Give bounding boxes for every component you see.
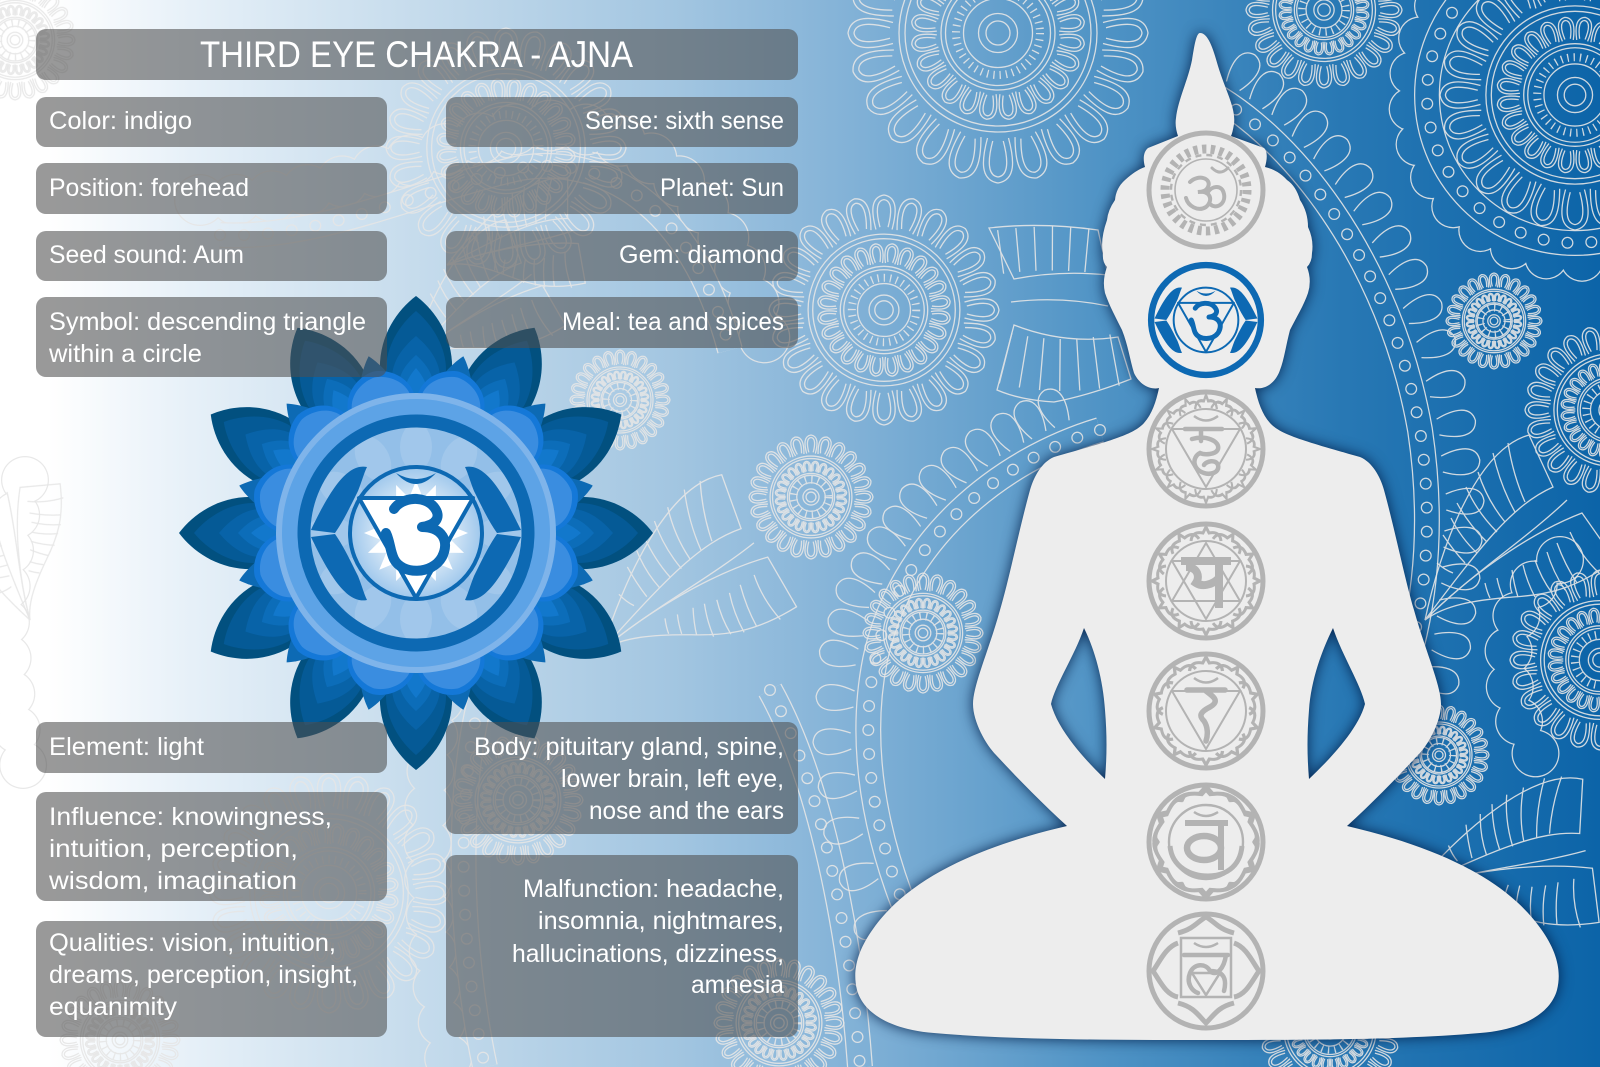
panel: color: Color: indigo <box>49 107 192 135</box>
panel: planet: Planet: Sun <box>660 174 784 202</box>
panel: seed sound <box>36 231 387 281</box>
panel: influence: intuition, perception, <box>49 835 298 863</box>
panel: body: nose and the ears <box>589 797 784 825</box>
chakra icon: solar plexus <box>1149 654 1263 768</box>
panel: sense: Sense: sixth sense <box>585 107 784 135</box>
panel: malfunction <box>446 855 798 1037</box>
chakra icon: crown <box>1149 133 1263 247</box>
meditating figure silhouette <box>855 33 1559 1040</box>
panel: sense <box>446 97 798 147</box>
panel: malfunction: amnesia <box>691 971 784 999</box>
panel: influence: wisdom, imagination <box>48 867 297 895</box>
panel: body <box>446 722 798 834</box>
panel: position <box>36 163 387 214</box>
panel: influence: Influence: knowingness, <box>49 803 332 831</box>
panel: qualities <box>36 921 387 1037</box>
inner lotus petals <box>230 347 602 719</box>
chakra icon: heart <box>1149 524 1263 638</box>
chakra icon: root <box>1149 914 1263 1028</box>
title banner <box>36 29 798 80</box>
lotus emblem: third eye chakra <box>179 296 653 770</box>
chakra icon: throat <box>1146 389 1266 509</box>
third eye symbol <box>304 421 528 645</box>
panel: position: Position: forehead <box>49 174 249 202</box>
panel: influence <box>36 792 387 901</box>
panel: symbol <box>36 297 387 377</box>
central disc <box>276 393 556 673</box>
panel: qualities: Qualities: vision, intuition, <box>49 929 336 957</box>
title banner: THIRD EYE CHAKRA - AJNA <box>200 34 633 75</box>
chakra icon: third eye (active) <box>1151 265 1261 375</box>
panel: qualities: dreams, perception, insight, <box>49 961 358 989</box>
panel: color <box>36 97 387 147</box>
panel: malfunction: hallucinations, dizziness, <box>512 940 784 968</box>
panel: meal <box>446 297 798 348</box>
panel: seed sound: Seed sound: Aum <box>49 241 244 269</box>
panel: planet <box>446 163 798 214</box>
panel: symbol: Symbol: descending triangle <box>49 308 366 336</box>
panel: element: Element: light <box>49 733 204 761</box>
panel: body: Body: pituitary gland, spine, <box>474 733 784 761</box>
panel: meal: Meal: tea and spices <box>562 308 784 336</box>
panel: gem: Gem: diamond <box>619 241 784 269</box>
panel: body: lower brain, left eye, <box>561 765 784 793</box>
panel: qualities: equanimity <box>49 993 178 1021</box>
panel: malfunction: insomnia, nightmares, <box>538 907 784 935</box>
outer lotus petals <box>179 296 653 770</box>
chakra icon: sacral <box>1146 785 1266 899</box>
panel: element <box>36 722 387 773</box>
panel: symbol: within a circle <box>48 340 202 368</box>
panel: gem <box>446 231 798 281</box>
panel: malfunction: Malfunction: headache, <box>523 875 784 903</box>
